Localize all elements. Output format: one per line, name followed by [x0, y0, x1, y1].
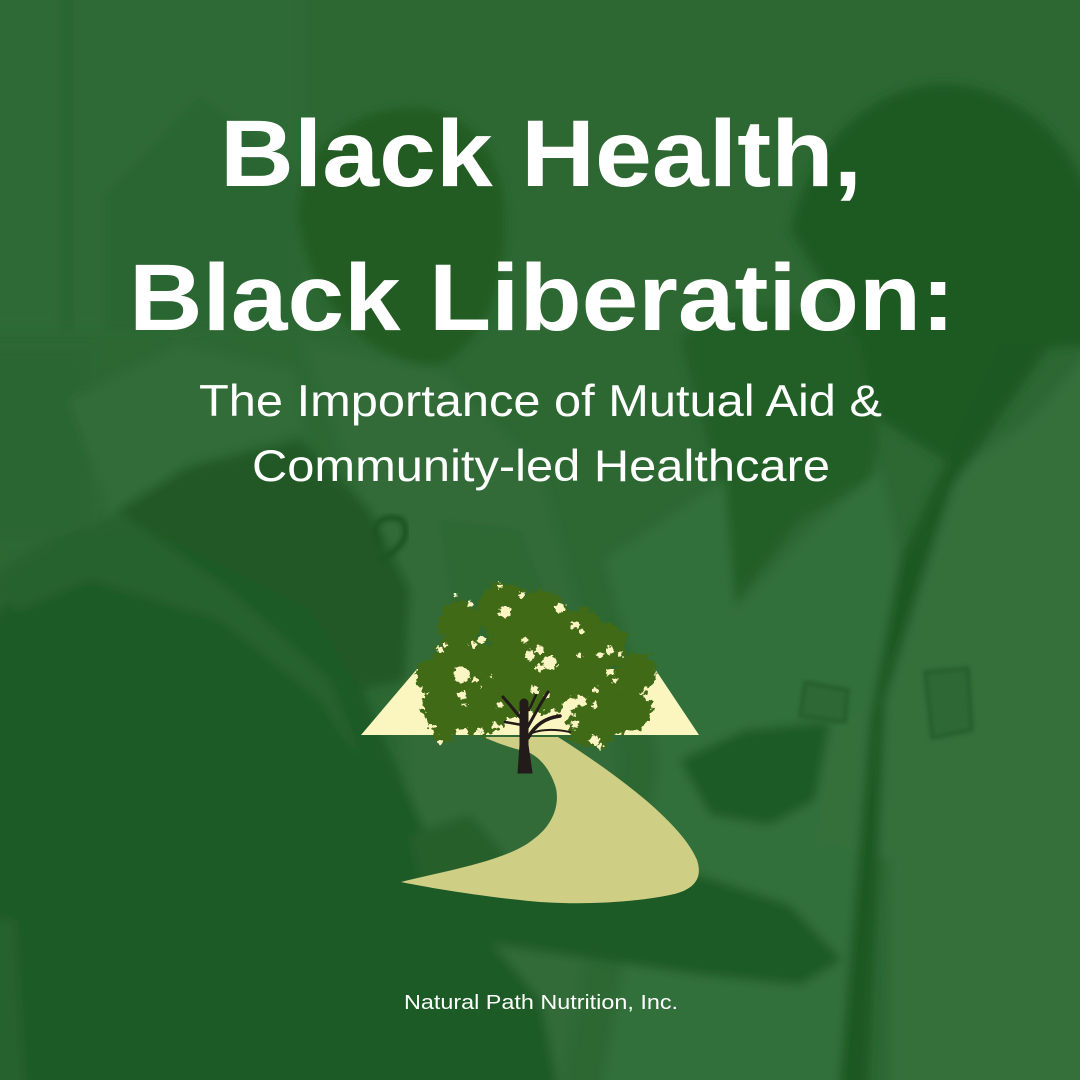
- subtitle: Community-led Healthcare: [252, 442, 830, 491]
- footer organisation name: Natural Path Nutrition, Inc.: [404, 991, 678, 1014]
- background figure: giving hand: [680, 722, 830, 825]
- background figure: building at upper left: [0, 0, 300, 330]
- background figure: headscarf: [68, 345, 305, 515]
- background figure: woman's coat: [0, 520, 560, 1080]
- background figure: forearm and open hand: [400, 875, 842, 985]
- logo: sunlit horizon trapezoid: [361, 669, 699, 735]
- background figure: right person hair: [790, 84, 1080, 470]
- subtitle: The Importance of Mutual Aid &: [199, 377, 882, 426]
- background figure: hair bun loop: [375, 518, 406, 560]
- title: [129, 101, 955, 351]
- logo: tree canopy: [416, 582, 656, 747]
- background figure: right person lapel shadow: [680, 306, 880, 610]
- background figure: coat badges: [925, 668, 972, 738]
- logo: tree and path: [361, 582, 699, 903]
- subtitle: [199, 377, 882, 491]
- logo: canopy leaf gaps: [437, 583, 623, 750]
- title: Black Liberation:: [129, 245, 955, 351]
- background figure: dark strap: [838, 345, 1050, 1080]
- background figure: centre person coat: [300, 340, 620, 1080]
- logo: tree trunk and branches: [503, 692, 570, 773]
- background figure: centre person head: [298, 108, 506, 365]
- logo: winding path: [401, 737, 699, 903]
- title: Black Health,: [220, 101, 862, 207]
- background figure: right person coat: [815, 340, 1080, 1080]
- background figure: middle coat: [600, 470, 900, 1080]
- background figure: woman's face: [110, 440, 410, 690]
